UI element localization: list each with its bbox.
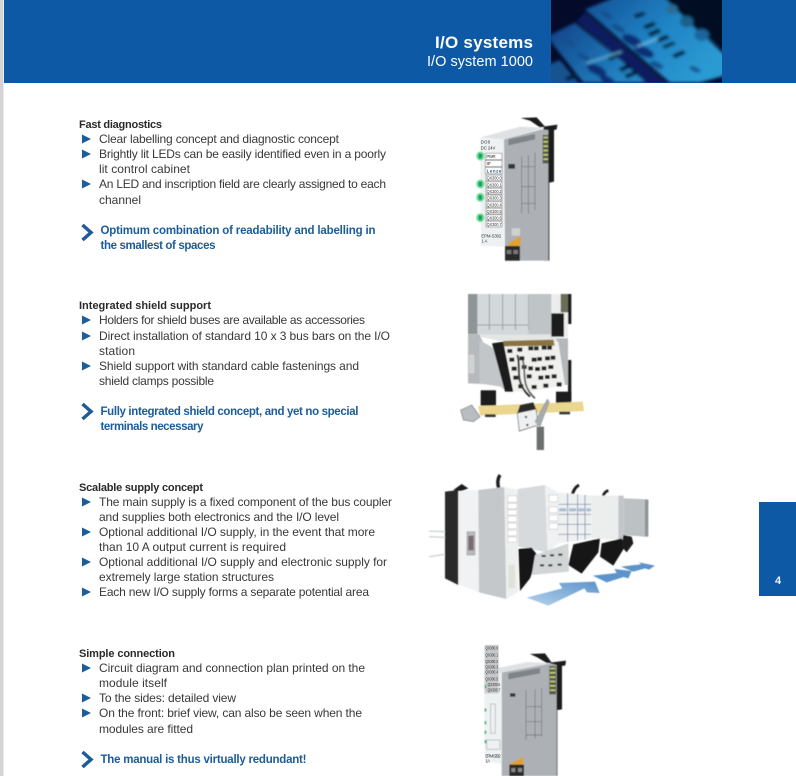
- module labels: Lenze: [487, 168, 502, 173]
- bullet list: Brightly lit LEDs can be easily identified even in a poorly: [99, 147, 386, 161]
- callout: the smallest of spaces: [100, 240, 216, 252]
- icon: green LEDs: [476, 152, 484, 222]
- header titles: I/O system 1000: [427, 54, 533, 70]
- module labels: QX300.3: [487, 196, 502, 201]
- module labels: 1A: [481, 239, 487, 244]
- module labels: EPM-S302: [481, 233, 502, 238]
- heading: Scalable supply concept: [79, 482, 203, 494]
- strip labels: QX300.0: [485, 646, 498, 651]
- side tab: chapter 4: [759, 502, 796, 596]
- callout: [82, 225, 376, 252]
- side tab: chapter 4: 4: [775, 575, 782, 587]
- strip labels: QX300.7: [488, 688, 501, 693]
- module labels: QX300.1: [487, 182, 502, 187]
- bullet list: The main supply is a fixed component of the bus coupler: [99, 495, 392, 509]
- module labels: QX300.6: [487, 215, 502, 220]
- heading: Simple connection: [79, 648, 175, 660]
- icon: I/O module with LEDs: [476, 117, 557, 261]
- section: scalable supply concept: [79, 482, 392, 599]
- icon: scalable module row with supply arrows: [429, 475, 655, 606]
- bullet list: lit control cabinet: [99, 162, 191, 176]
- icon: module with shield bus: [461, 294, 584, 450]
- bullet list: shield clamps possible: [99, 374, 214, 388]
- header titles: [427, 33, 533, 70]
- strip labels: QX300.3: [485, 665, 498, 670]
- callout: [82, 404, 358, 433]
- module labels: [481, 140, 502, 244]
- strip labels: EPM-S302: [485, 753, 501, 758]
- icon: supply arrows: [527, 562, 655, 606]
- module labels: QX300.4: [487, 202, 502, 207]
- strip labels: 1A: [485, 759, 490, 764]
- strip labels: [485, 646, 501, 764]
- module labels: QX300.7: [487, 222, 502, 227]
- bullet list: An LED and inscription field are clearly assigned to each: [99, 177, 386, 191]
- callout: Optimum combination of readability and labelling in: [100, 225, 376, 237]
- header photo: illuminated terminals: [547, 0, 727, 87]
- module labels: QX300.2: [487, 189, 502, 194]
- strip labels: QX300.5: [485, 676, 498, 681]
- section: simple connection: [79, 648, 365, 767]
- header banner: [4, 0, 796, 87]
- bullet list: station: [99, 344, 135, 358]
- bullet list: Clear labelling concept and diagnostic concept: [99, 132, 340, 146]
- strip labels: QX300.4: [485, 670, 498, 675]
- bullet list: Direct installation of standard 10 x 3 bus bars on the I/O: [99, 329, 390, 343]
- strip labels: QX300.2: [485, 659, 498, 664]
- module labels: SF: [486, 161, 491, 166]
- bullet list: than 10 A output current is required: [99, 540, 286, 554]
- module labels: DO8: [481, 140, 491, 145]
- callout: The manual is thus virtually redundant!: [100, 754, 306, 766]
- bullet list: Holders for shield buses are available as accessories: [99, 313, 365, 327]
- module labels: DC 24V: [481, 145, 495, 150]
- header titles: I/O systems: [435, 33, 533, 52]
- section: fast diagnostics: [79, 119, 386, 252]
- strip labels: QX300.1: [485, 652, 498, 657]
- heading: Fast diagnostics: [79, 119, 162, 131]
- bullet list: Each new I/O supply forms a separate potential area: [99, 585, 369, 599]
- bullet list: Optional additional I/O supply and electronic supply for: [99, 555, 387, 569]
- bullet list: [82, 495, 392, 599]
- icon: module with fold-out label strip: [484, 645, 566, 776]
- bullet list: module itself: [99, 676, 168, 690]
- bullet list: Optional additional I/O supply, in the event that more: [99, 525, 375, 539]
- bullet list: Circuit diagram and connection plan printed on the: [99, 661, 365, 675]
- callout: terminals necessary: [100, 421, 204, 433]
- callout: Fully integrated shield concept, and yet no special: [100, 406, 358, 418]
- bullet list: modules are fitted: [99, 722, 193, 736]
- bullet list: extremely large station structures: [99, 570, 274, 584]
- strip labels: QX300.6: [488, 682, 501, 687]
- bullet list: channel: [99, 193, 141, 207]
- bullet list: [82, 661, 365, 736]
- bullet list: [82, 132, 386, 207]
- bullet list: To the sides: detailed view: [99, 691, 236, 705]
- bullet list: [82, 313, 390, 388]
- bullet list: On the front: brief view, can also be seen when the: [99, 706, 362, 720]
- section: integrated shield support: [79, 300, 390, 433]
- bullet list: and supplies both electronics and the I/O level: [99, 510, 339, 524]
- module labels: QX300.5: [487, 209, 502, 214]
- module labels: PWR: [486, 154, 496, 159]
- module labels: QX300.0: [487, 176, 502, 181]
- heading: Integrated shield support: [79, 300, 211, 312]
- bullet list: Shield support with standard cable fastenings and: [99, 359, 359, 373]
